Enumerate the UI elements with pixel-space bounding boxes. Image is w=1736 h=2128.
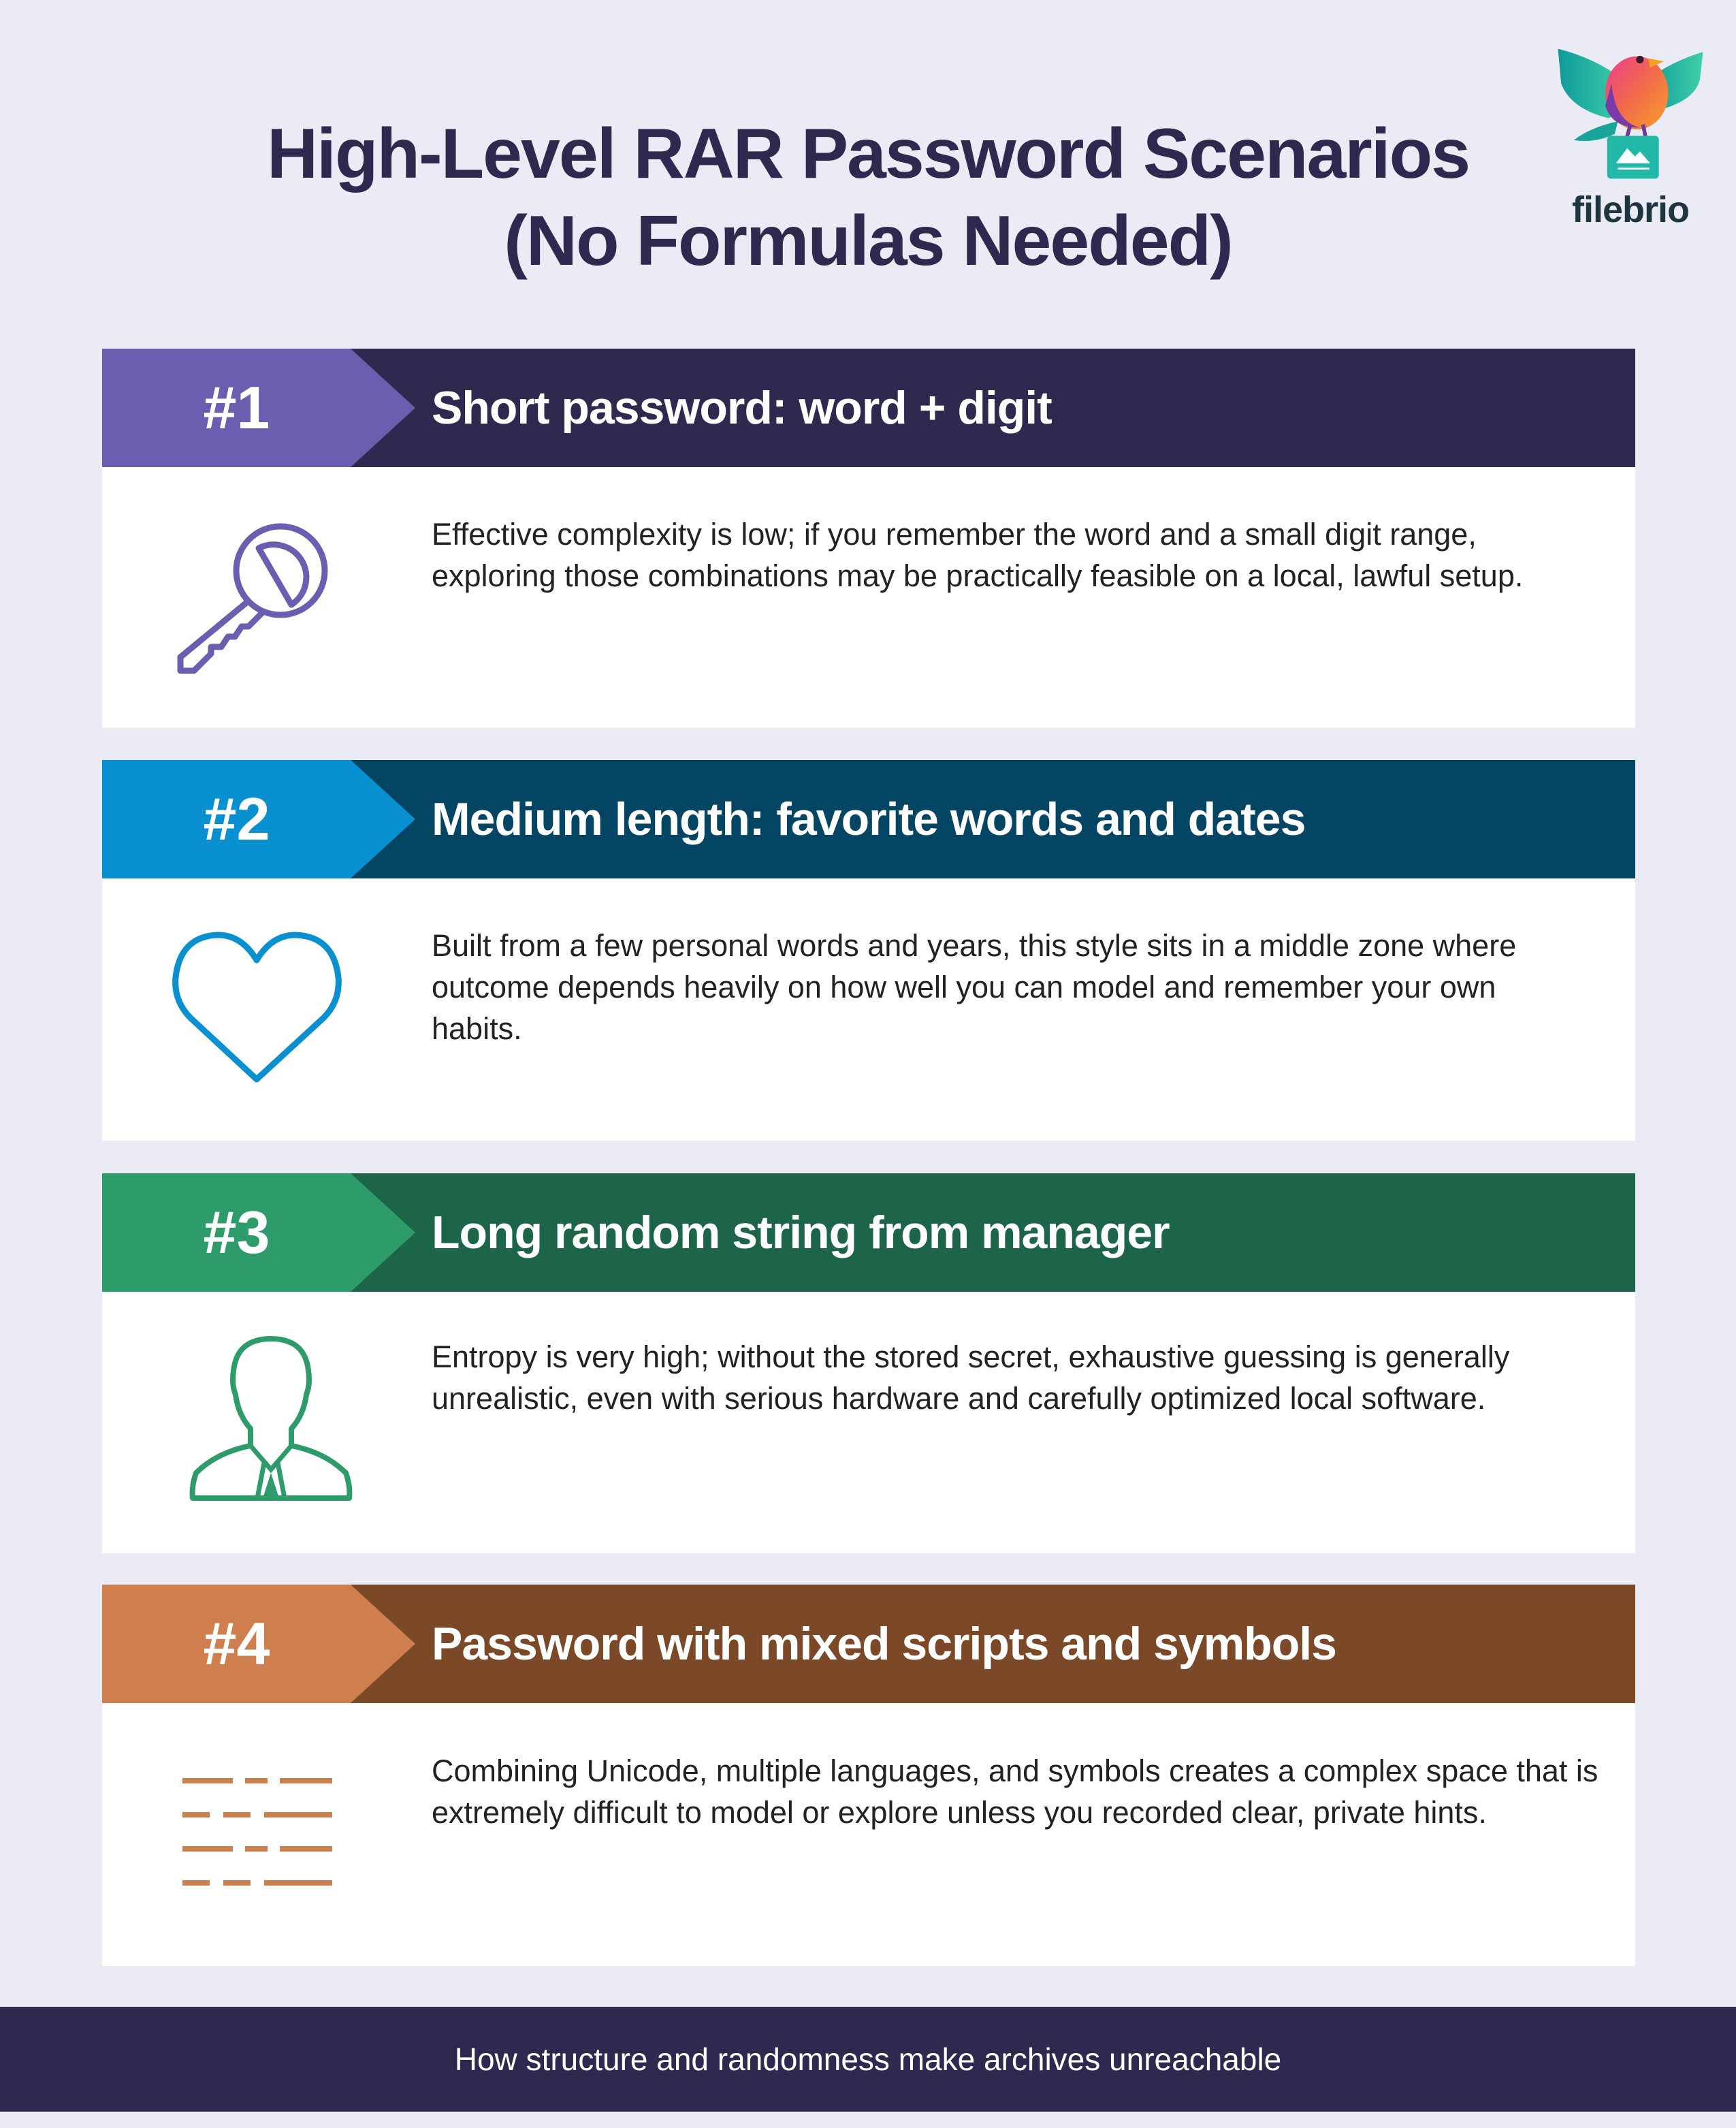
text 4: extremely difficult to model or explore unless you recorded clear, private hints.: [432, 1795, 1487, 1830]
text 1: exploring those combinations may be practically feasible on a local, lawful setup.: [432, 558, 1523, 593]
icon: person: [189, 1336, 353, 1501]
text 2: Built from a few personal words and years, this style sits in a middle zone where: [432, 928, 1516, 963]
footer: [0, 2007, 1736, 2112]
text 1: Effective complexity is low; if you remember the word and a small digit range,: [432, 517, 1477, 552]
icon: lines: [182, 1778, 332, 1886]
text 2: habits.: [432, 1011, 522, 1046]
header 4: [102, 1585, 1635, 1703]
header 1: [102, 349, 1635, 467]
text 3: [432, 1339, 1510, 1416]
logo: filebrio: filebrio: [1572, 189, 1689, 230]
header 2: #2: [204, 785, 270, 853]
header 4: #4: [204, 1610, 270, 1677]
panel 4: [102, 1585, 1635, 1966]
panel 3: [102, 1173, 1635, 1553]
text 3: Entropy is very high; without the stored secret, exhaustive guessing is generally: [432, 1339, 1509, 1374]
title: [267, 114, 1469, 281]
header 3: #3: [204, 1198, 270, 1266]
panel 1: [102, 349, 1635, 728]
panel 2: [102, 760, 1635, 1141]
text 2: outcome depends heavily on how well you can model and remember your own: [432, 970, 1496, 1004]
header 3: Long random string from manager: [432, 1207, 1170, 1258]
icon: key: [177, 523, 328, 674]
title: High-Level RAR Password Scenarios: [267, 114, 1469, 193]
text 3: unrealistic, even with serious hardware and carefully optimized local software.: [432, 1381, 1485, 1416]
title: (No Formulas Needed): [504, 202, 1232, 281]
text 4: [432, 1753, 1598, 1830]
text 2: [432, 928, 1516, 1046]
header 2: [102, 760, 1635, 878]
text 1: [432, 517, 1523, 593]
logo: filebrio: [1558, 49, 1703, 230]
icon: heart: [172, 932, 342, 1083]
header 1: Short password: word + digit: [432, 382, 1052, 434]
header 4: Password with mixed scripts and symbols: [432, 1618, 1336, 1670]
header 1: #1: [204, 374, 270, 441]
text 4: Combining Unicode, multiple languages, and symbols creates a complex space that is: [432, 1753, 1598, 1788]
footer: How structure and randomness make archives unreachable: [455, 2042, 1281, 2077]
header 3: [102, 1173, 1635, 1292]
header 2: Medium length: favorite words and dates: [432, 793, 1305, 845]
